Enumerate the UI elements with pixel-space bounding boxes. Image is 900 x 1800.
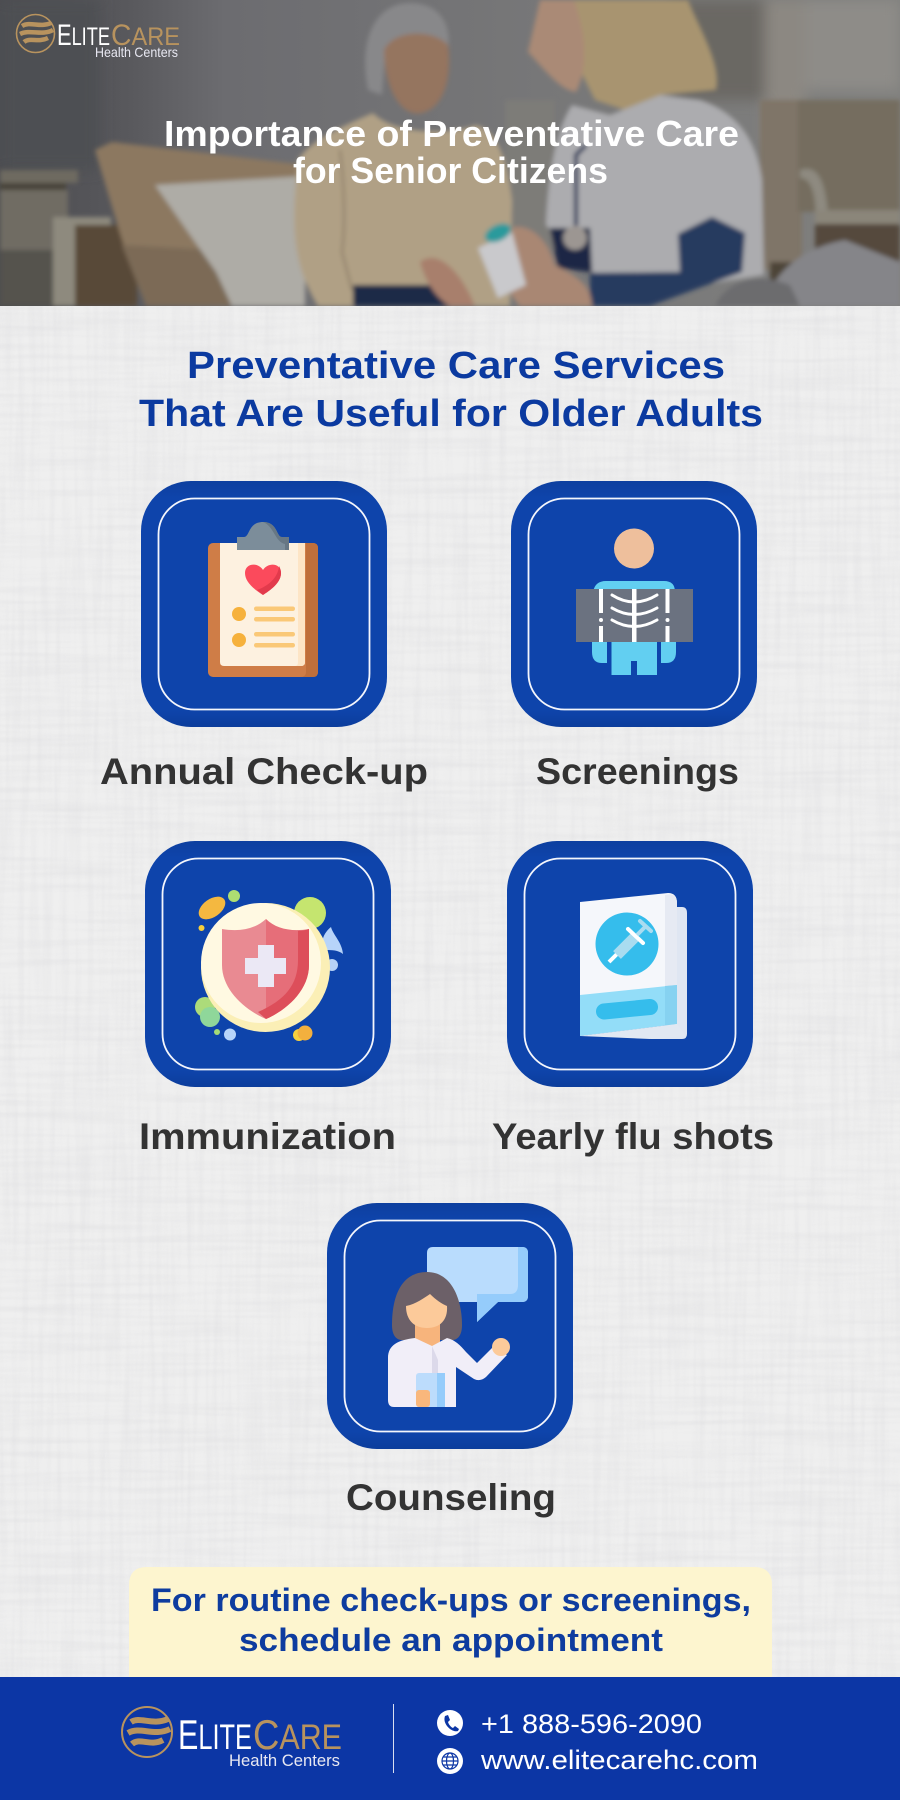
service: screenings (511, 481, 757, 792)
call to action: For routine check-ups or screenings, (151, 1582, 751, 1618)
section heading: That Are Useful for Older Adults (139, 393, 763, 435)
top logo: Health Centers (95, 44, 178, 60)
top logo: CARE (111, 19, 180, 52)
footer logo: Health Centers (229, 1751, 340, 1770)
sofa arm (53, 217, 111, 306)
blanket (765, 240, 900, 306)
stethoscope (563, 226, 587, 250)
nurse face (528, 0, 585, 92)
label: Counseling (346, 1477, 556, 1518)
section heading: Preventative Care Services (187, 345, 725, 387)
call to action (129, 1567, 772, 1677)
label: Immunization (139, 1116, 396, 1157)
tan pillow (94, 140, 296, 250)
call to action: schedule an appointment (239, 1622, 663, 1658)
section heading (139, 345, 763, 435)
title (164, 113, 739, 191)
woman's hair (365, 3, 449, 95)
background texture (0, 306, 900, 1677)
title: for Senior Citizens (293, 150, 608, 191)
service: counseling (327, 1203, 573, 1518)
jeans (353, 285, 451, 306)
nurse hair (572, 0, 717, 115)
service: yearly flu shots (492, 841, 774, 1157)
title: Importance of Preventative Care (164, 113, 739, 154)
icon: shield (195, 890, 343, 1041)
top logo: ELITE (57, 19, 110, 52)
icon: vaccine booklet (580, 893, 687, 1039)
white pillow (155, 176, 305, 306)
footer logo (122, 1707, 342, 1770)
footer (0, 1677, 900, 1800)
navy sleeve (590, 217, 745, 306)
website: www.elitecarehc.com (480, 1745, 758, 1775)
icon: phone (437, 1710, 463, 1736)
hero photo (0, 0, 900, 306)
label: Annual Check-up (100, 751, 428, 792)
icon: counselor (388, 1247, 528, 1407)
footer logo: CARE (253, 1711, 342, 1758)
hands (420, 258, 475, 306)
top logo (16, 14, 180, 60)
phone number: +1 888-596-2090 (481, 1709, 702, 1739)
sweater (294, 113, 512, 306)
label: Yearly flu shots (492, 1116, 774, 1157)
service: immunization (139, 841, 396, 1157)
service: annual check-up (100, 481, 428, 792)
curtain, chair (760, 100, 802, 270)
woman's face (384, 34, 449, 113)
navy scrubs (550, 228, 592, 272)
sill and radiator (0, 170, 78, 183)
icon: clipboard (208, 522, 318, 677)
label: Screenings (536, 751, 739, 792)
background right of the woman (505, 100, 555, 250)
footer logo: ELITE (178, 1711, 252, 1758)
icon: x-ray (576, 528, 693, 675)
icon: globe (437, 1748, 463, 1774)
uniform (546, 95, 764, 285)
